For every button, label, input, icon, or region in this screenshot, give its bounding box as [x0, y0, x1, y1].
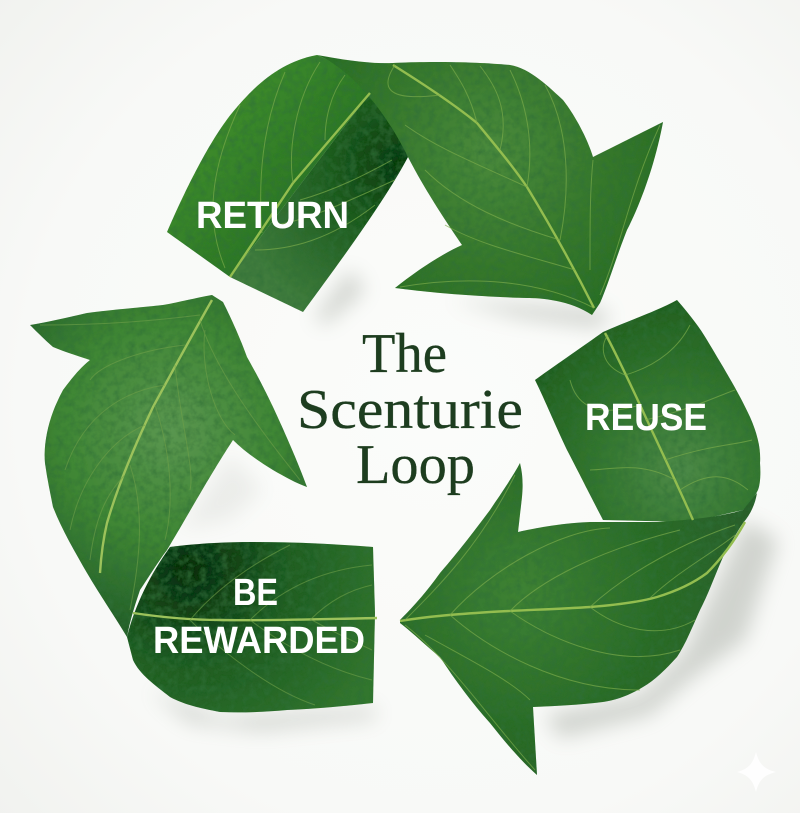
title: Loop — [356, 434, 475, 496]
title: The — [362, 323, 447, 385]
veins — [405, 325, 752, 770]
midribs — [400, 333, 745, 621]
veins — [213, 62, 660, 308]
leaf back fold: upper half — [167, 55, 370, 277]
label: be rewarded: BE — [233, 572, 278, 614]
icon: sparkle — [737, 752, 776, 792]
midribs — [230, 65, 594, 308]
label: reuse: REUSE — [585, 397, 707, 439]
leaf front arrowhead — [400, 463, 757, 775]
leaf front arrowhead — [317, 55, 663, 315]
leaf back fold — [535, 300, 760, 522]
label: be rewarded: REWARDED — [153, 620, 365, 662]
title: Scenturie — [297, 379, 523, 441]
label: return: RETURN — [196, 195, 349, 237]
leaf arrow: return — [167, 55, 663, 315]
leaf front arrowhead — [30, 295, 307, 637]
leaf arrow: reuse — [400, 300, 760, 775]
leaf arrow: be rewarded — [30, 295, 377, 712]
leaf shadows — [150, 270, 778, 738]
leaf back fold: shaded half — [230, 93, 408, 312]
midribs — [100, 300, 377, 620]
leaf back fold — [127, 542, 375, 712]
veins — [40, 315, 372, 705]
